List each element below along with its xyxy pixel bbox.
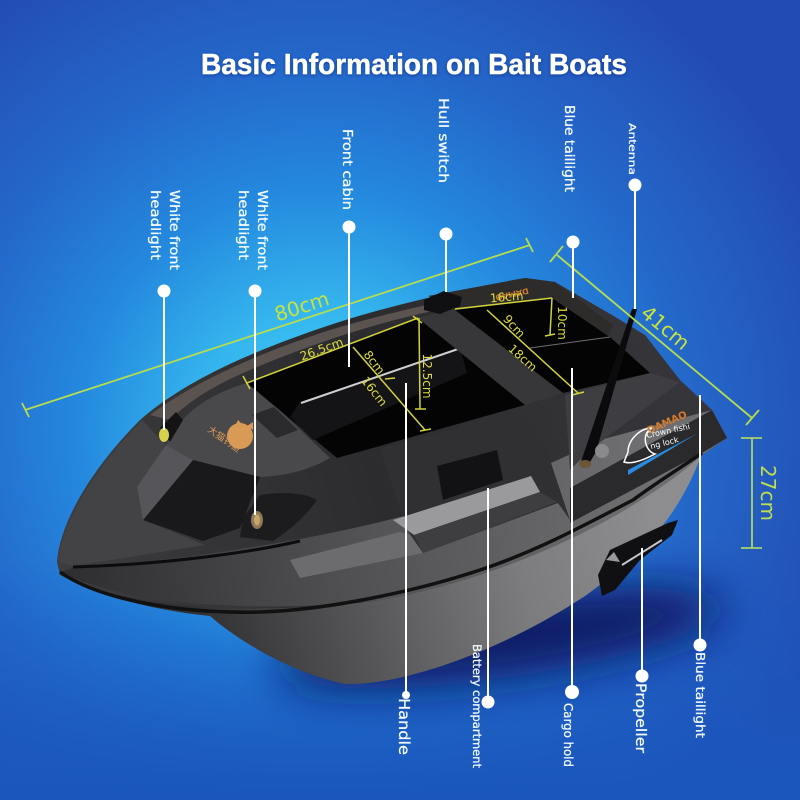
callout: blue taillight right: [693, 395, 708, 738]
antenna: [579, 309, 637, 468]
lid dark slot: [414, 492, 557, 553]
inner dimensions: front cabin: 12.5cm: [420, 353, 434, 399]
callout: cargo hold: Cargo hold: [561, 703, 575, 767]
rear cabin: [455, 298, 650, 393]
callout: white front headlight left: [147, 190, 181, 430]
callout: propeller: Propeller: [632, 683, 648, 753]
callout: hull switch: Hull switch: [435, 98, 450, 183]
inner dimensions: front cabin: 16cm: [358, 374, 390, 409]
logo: cat: [205, 420, 253, 455]
bow left facet: [137, 445, 193, 520]
callout: hull switch: [435, 98, 452, 292]
deck brand: DAMAO: [494, 286, 529, 302]
callout: battery compartment: Battery compartment: [470, 644, 484, 768]
inner dimensions: rear cabin: [455, 289, 584, 395]
lid light stripe: [393, 476, 540, 535]
cabin handle rail: [290, 348, 467, 440]
left headlight: [159, 412, 183, 442]
side logo: [624, 410, 698, 475]
callout: blue taillight right: Blue taillight: [693, 652, 708, 738]
side logo: Crown fishi: [646, 422, 691, 440]
inner dimensions: front cabin: [243, 316, 434, 431]
dimension: height 27cm: 27cm: [756, 465, 780, 521]
front cabin: [247, 318, 525, 458]
callout: white front headlight right: White front: [254, 190, 269, 270]
upper groove: [73, 541, 300, 567]
inner dimensions: rear cabin: 18cm: [506, 342, 540, 374]
hull underside: [60, 438, 727, 684]
dimension: length 80cm: [22, 238, 533, 417]
side logo: DAMAO: [646, 410, 689, 437]
cabin edge: [530, 337, 610, 348]
side logo: ng lock: [649, 435, 680, 451]
rear raised block: [428, 278, 613, 336]
callout: handle: [395, 383, 413, 755]
side band: [60, 410, 727, 607]
callout: cargo hold: [561, 368, 579, 767]
callout: front cabin: [339, 129, 356, 367]
logo: cat: 大猫钓鱼: [205, 424, 243, 455]
bow light facet: [58, 420, 205, 566]
waterline groove: [60, 453, 702, 612]
callout: front cabin: Front cabin: [339, 129, 354, 210]
foredeck plate: [166, 382, 330, 477]
dimension: width 41cm: [550, 246, 759, 425]
callout: white front headlight right: headlight: [235, 190, 250, 260]
callout: antenna: [626, 123, 642, 309]
dimension: length 80cm: 80cm: [272, 286, 332, 326]
bulkhead: [418, 308, 563, 405]
bracket plate: [252, 407, 298, 438]
bow dark facet: [143, 460, 260, 541]
callout: handle: Handle: [395, 698, 413, 755]
lid recess: [437, 450, 503, 500]
side band highlight: [290, 532, 423, 578]
deck: [57, 278, 727, 608]
right headlight pod: [240, 493, 317, 541]
dimension: width 41cm: 41cm: [636, 300, 695, 355]
gunwale strip: [150, 296, 470, 420]
dimension: height 27cm: [741, 438, 780, 548]
rear deck facet: [565, 373, 680, 470]
callout: antenna: Antenna: [626, 123, 637, 175]
inner dimensions: front cabin: 26.5cm: [298, 335, 345, 364]
bait boat illustration: [57, 278, 727, 684]
callout: blue taillight top: [561, 105, 580, 298]
hull switch: [424, 291, 462, 314]
callout: blue taillight top: Blue taillight: [561, 105, 576, 192]
callout: battery compartment: [470, 488, 494, 768]
callout: white front headlight left: headlight: [147, 190, 162, 260]
inner dimensions: front cabin: 8cm: [361, 348, 388, 377]
inner dimensions: rear cabin: 16cm: [489, 289, 524, 305]
battery lid: [380, 412, 570, 553]
rear dark band: [570, 410, 727, 523]
propeller guard: [598, 520, 678, 596]
callout: white front headlight left: White front: [166, 190, 181, 270]
status LED: [595, 444, 609, 458]
callout: white front headlight right: [235, 190, 269, 515]
inner dimensions: rear cabin: 10cm: [555, 306, 569, 340]
title: Basic Information on Bait Boats: [201, 49, 627, 81]
callout: propeller: [632, 548, 648, 753]
inner dimensions: rear cabin: 9cm: [500, 312, 528, 341]
